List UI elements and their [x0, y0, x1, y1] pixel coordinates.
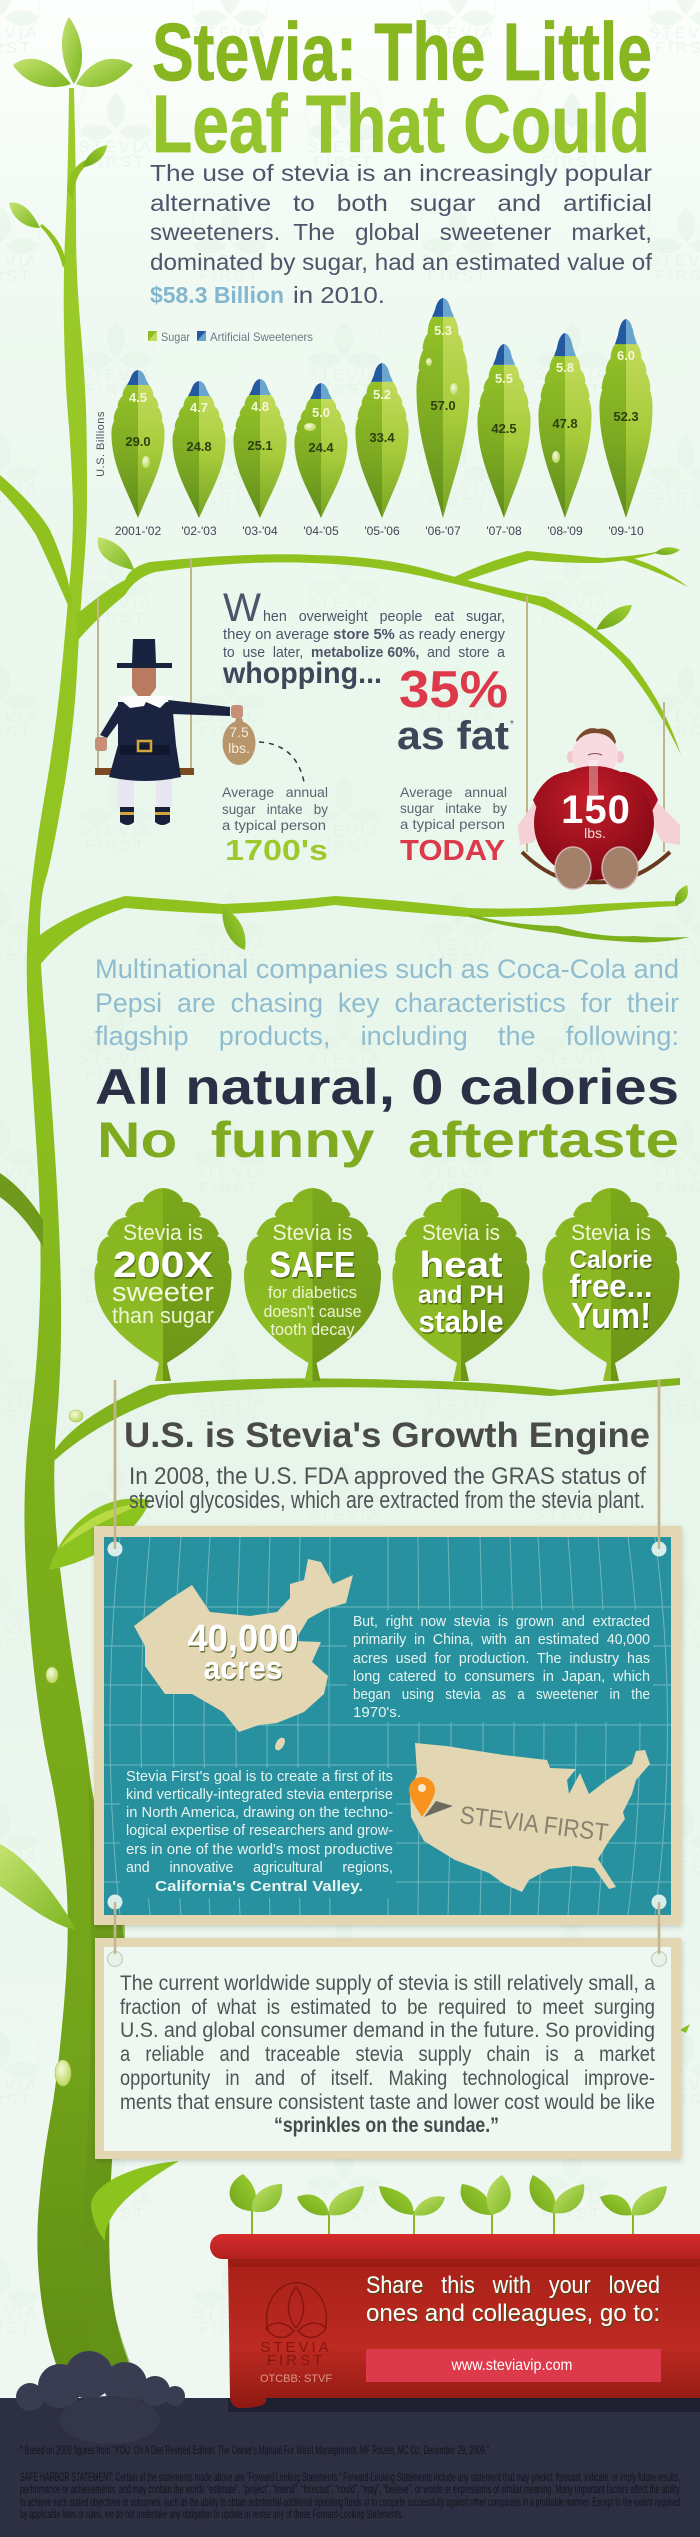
soil: [0, 2351, 700, 2537]
sugar text block: to use later, metabolize 60%, and store a: [223, 644, 506, 661]
pilgrim on swing: [95, 558, 243, 825]
connector ropes: [115, 1902, 659, 1959]
leaf 04-05: 24.4: [308, 440, 334, 455]
key characteristics headline: All natural, 0 calories: [95, 1059, 679, 1115]
leaf card: 200X: Stevia is: [123, 1220, 203, 1245]
Stevia First paragraph: kind vertically-integrated stevia enterprise: [126, 1786, 393, 1803]
seedlings: [230, 2174, 667, 2235]
leaf 02-03: 4.7: [190, 400, 208, 415]
chart year labels: '06-'07: [425, 524, 461, 538]
sugar text block: *: [510, 719, 514, 730]
map: China: [134, 1559, 353, 1752]
leaf card: SAFE: tooth decay: [270, 1320, 355, 1339]
overweight person on swing: [518, 596, 680, 889]
leaf card: calorie free: Yum!: [571, 1295, 651, 1336]
map panel: [94, 1380, 681, 1925]
leaf 06-07: 5.3: [434, 323, 452, 338]
Stevia First paragraph: ers in one of the world's most productive: [126, 1841, 393, 1858]
key characteristics headline: [95, 1059, 679, 1168]
China paragraph: began using stevia as a sweetener in the: [353, 1686, 650, 1703]
logo on planter: STEVIA: [260, 2339, 332, 2356]
leaf 07-08: 5.5: [495, 371, 513, 386]
Stevia First paragraph: logical expertise of researchers and grow-: [126, 1822, 393, 1839]
share call to action: ones and colleagues, go to:: [366, 2300, 660, 2327]
hanging ropes: [115, 1380, 659, 1965]
chart year labels: '02-'03: [181, 524, 217, 538]
bar chart: sweetener market leaves: [111, 298, 653, 518]
sugar text block: they on average store 5% as ready energy: [223, 626, 505, 643]
intro paragraph: in 2010.: [293, 282, 385, 308]
acres callout: [188, 1618, 298, 1686]
panel holes: [108, 1542, 666, 1910]
leaf card: calorie free: Stevia is: [571, 1220, 651, 1245]
chart year labels: '09-'10: [608, 524, 644, 538]
sugar sack: [222, 718, 256, 765]
chart legend: Sugar: [161, 330, 190, 344]
seedling 1: [230, 2174, 282, 2212]
sugar text block: 35%: [399, 661, 508, 719]
leaf card: heat: and PH: [418, 1281, 504, 1309]
leaf 03-04: [233, 379, 287, 518]
China paragraph: long catered to consumers in Japan, which: [353, 1668, 650, 1685]
seedling 4: [461, 2175, 511, 2215]
seedling 5: [530, 2175, 584, 2213]
supply paragraph: ments that ensure consistent taste and lower cost would be like: [120, 2091, 655, 2114]
leaf card: calorie free: [542, 1188, 680, 1381]
leaf 05-06: 5.2: [373, 387, 391, 402]
seedling 2: [297, 2186, 364, 2216]
Stevia First paragraph: Stevia First's goal is to create a first of its: [126, 1768, 393, 1785]
leaf 02-03: [172, 381, 226, 518]
seedling 6: [600, 2186, 667, 2216]
leaf card: calorie free: Calorie: [570, 1246, 653, 1274]
leaf 04-05: [294, 383, 348, 518]
China paragraph: acres used for production. The industry has: [353, 1650, 650, 1667]
today caption: a typical person: [400, 816, 505, 832]
sugar text block: whopping...: [222, 657, 382, 690]
leaf card: 200X: [94, 1188, 232, 1381]
leaf card: 200X: than sugar: [112, 1303, 214, 1328]
leaf 05-06: 33.4: [369, 430, 395, 445]
leaf 08-09: 47.8: [552, 416, 578, 431]
logo on planter: OTCBB: STVF: [260, 2373, 332, 2385]
multinational companies paragraph: flagship products, including the following:: [95, 1021, 679, 1051]
leaf 03-04: 4.8: [251, 399, 269, 414]
leaf 08-09: 5.8: [556, 360, 574, 375]
chart year labels: '07-'08: [486, 524, 522, 538]
intro paragraph: dominated by sugar, had an estimated value of: [150, 249, 653, 275]
supply paragraph: The current worldwide supply of stevia is still relatively small, a: [120, 1972, 655, 1995]
multinational companies paragraph: Pepsi are chasing key characteristics for their: [95, 988, 679, 1018]
multinational companies paragraph: Multinational companies such as Coca-Cola and: [95, 954, 679, 984]
chart axis label: U.S. Billions: [95, 411, 107, 477]
Stevia First paragraph: in North America, drawing on the techno-: [126, 1804, 393, 1821]
growth engine heading: U.S. is Stevia's Growth Engine: [124, 1416, 650, 1455]
dashed arrow: [259, 742, 304, 782]
dew drops: [46, 1410, 83, 2086]
leaf 2001-02: 29.0: [125, 434, 151, 449]
1700s caption: sugar intake by: [222, 801, 328, 817]
leaf card: SAFE: for diabetics: [268, 1283, 357, 1302]
FDA paragraph: In 2008, the U.S. FDA approved the GRAS status of: [129, 1463, 646, 1490]
chart year labels: [115, 524, 644, 538]
leaf 09-10: [599, 319, 653, 518]
pin label: STEVIA FIRST: [458, 1801, 610, 1847]
Stevia First paragraph: California's Central Valley.: [155, 1878, 363, 1895]
today caption: TODAY: [400, 835, 505, 867]
intro paragraph: [150, 160, 653, 308]
logo on planter: [260, 2283, 332, 2385]
map: United States: [410, 1743, 650, 1892]
FDA paragraph: [129, 1463, 646, 1514]
chart year labels: '03-'04: [242, 524, 278, 538]
leaf 09-10: 52.3: [613, 409, 639, 424]
overweight person on swing: lbs.: [584, 825, 606, 841]
multinational companies paragraph: [95, 954, 679, 1051]
leaf 06-07: [416, 298, 470, 518]
leaf card: 200X: sweeter: [112, 1277, 214, 1307]
intro paragraph: sweeteners. The global sweetener market,: [150, 219, 652, 245]
seedling 3: [379, 2186, 445, 2216]
leaf card: heat: [392, 1188, 530, 1381]
intro paragraph: The use of stevia is an increasingly popular: [150, 160, 652, 186]
leaf card: SAFE: doesn't cause: [264, 1302, 362, 1321]
sugar text block: hen overweight people eat sugar,: [263, 608, 505, 625]
planter box: [210, 2234, 700, 2408]
intro paragraph: $58.3 Billion: [150, 282, 284, 308]
leaf 03-04: 25.1: [247, 438, 273, 453]
supply paragraph: [120, 1972, 655, 2137]
intro paragraph: alternative to both sugar and artificial: [150, 190, 652, 216]
leaf card: SAFE: [244, 1188, 381, 1381]
today caption: sugar intake by: [400, 800, 507, 816]
China paragraph: [353, 1613, 650, 1721]
title: [152, 7, 652, 170]
url button: www.steviavip.com: [451, 2357, 572, 2374]
url button: [366, 2349, 661, 2382]
key characteristics headline: No funny aftertaste: [97, 1112, 679, 1168]
Stevia First paragraph: [126, 1768, 393, 1895]
sugar text block: as fat: [397, 714, 509, 758]
leaf 08-09: [538, 333, 592, 518]
chart year labels: '05-'06: [364, 524, 400, 538]
leaf 07-08: 42.5: [491, 421, 517, 436]
leaf card: heat: Stevia is: [422, 1220, 500, 1245]
China paragraph: 1970's.: [353, 1704, 401, 1721]
leaf 02-03: 24.8: [186, 439, 212, 454]
leaf 04-05: 5.0: [312, 405, 330, 420]
share call to action: [366, 2272, 660, 2327]
acres callout: 40,000: [188, 1618, 298, 1660]
sugar sack: lbs.: [228, 740, 250, 756]
sugar sack: 7.5: [229, 724, 249, 740]
leaf 06-07: 57.0: [430, 398, 456, 413]
1700s caption: Average annual: [222, 784, 328, 800]
sugar text block: W: [223, 586, 261, 630]
leaf 05-06: [355, 363, 409, 518]
overweight person on swing: 150: [561, 788, 631, 832]
leaf card: calorie free: free...: [570, 1268, 652, 1304]
supply paragraph: “sprinkles on the sundae.”: [274, 2114, 499, 2137]
supply paragraph: U.S. and global consumer demand in the future. So providing: [120, 2019, 655, 2042]
leaf card: SAFE: SAFE: [270, 1244, 356, 1285]
safe harbor statement: by applicable laws or rules, we do not undertake any obligation to update or revise any of these Forward-Looking Statements.: [20, 2507, 403, 2521]
logo on planter: FIRST: [267, 2352, 325, 2369]
map pin: [409, 1777, 453, 1817]
Stevia First paragraph: and innovative agricultural regions,: [126, 1859, 393, 1876]
1700s caption: 1700's: [225, 835, 328, 867]
leaf 2001-02: [111, 370, 165, 518]
1700s caption: [222, 784, 328, 867]
share call to action: Share this with your loved: [366, 2272, 660, 2299]
map grid: [104, 1537, 671, 1915]
leaf 07-08: [477, 344, 531, 518]
leaf card: heat: stable: [418, 1304, 504, 1339]
supply panel: [95, 1938, 681, 2159]
safe harbor statement: [20, 2470, 680, 2521]
1700s caption: a typical person: [222, 817, 326, 833]
chart legend: [148, 330, 313, 344]
chart year labels: '08-'09: [547, 524, 583, 538]
chart year labels: 2001-'02: [115, 524, 161, 538]
leaf 2001-02: 4.5: [129, 390, 147, 405]
chart legend: Artificial Sweeteners: [210, 330, 313, 344]
today caption: Average annual: [400, 784, 507, 800]
chart year labels: '04-'05: [303, 524, 339, 538]
acres callout: acres: [204, 1650, 282, 1686]
today caption: [400, 784, 507, 867]
leaf card: heat: heat: [420, 1244, 503, 1285]
leaf card: SAFE: Stevia is: [272, 1220, 352, 1245]
sugar text block: [222, 586, 514, 758]
China paragraph: But, right now stevia is grown and extracted: [353, 1613, 650, 1630]
text backing: [347, 1610, 653, 1722]
leaf 09-10: 6.0: [617, 348, 635, 363]
China paragraph: primarily in China, with an estimated 40,000: [353, 1631, 650, 1648]
leaf card: 200X: 200X: [113, 1244, 213, 1285]
